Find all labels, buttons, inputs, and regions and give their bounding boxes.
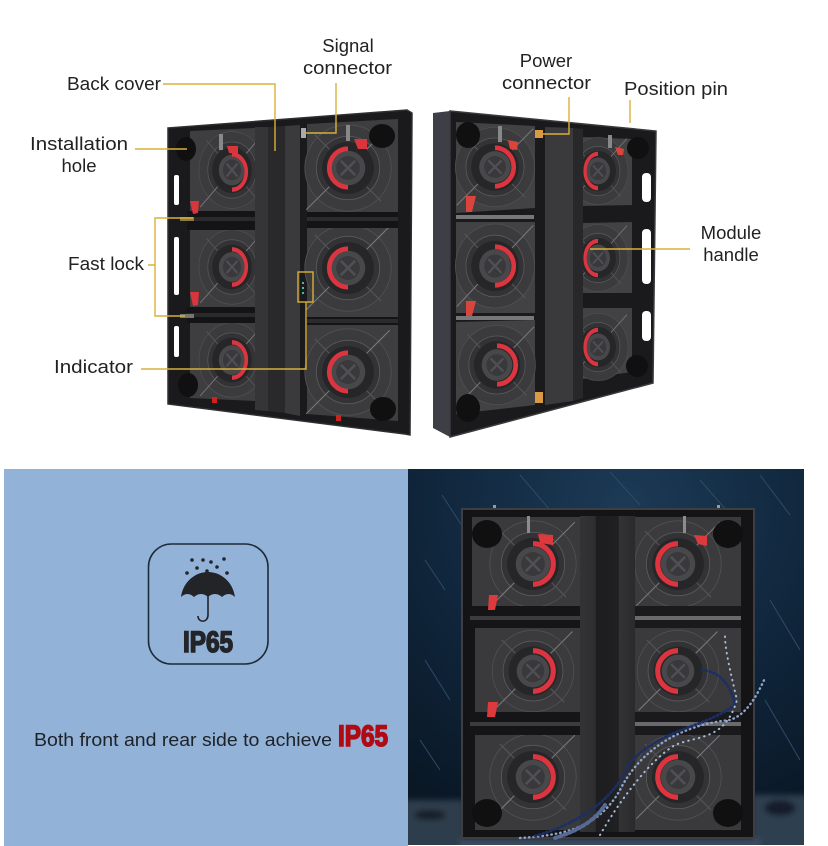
- module hubs: [490, 521, 721, 820]
- callout: signal connector: [303, 35, 392, 133]
- callout: indicator: Indicator: [54, 356, 133, 377]
- wet ground: [400, 795, 812, 846]
- module backplates: [190, 119, 398, 421]
- panel: IP65 description: [4, 469, 408, 846]
- right cabinet: rear view: [433, 111, 656, 437]
- callout: power connector: connector: [502, 72, 591, 93]
- cabinet frame: [168, 110, 412, 435]
- position pins: [493, 505, 720, 508]
- corner holes: [472, 520, 743, 827]
- corner installation holes: [176, 124, 396, 421]
- module backplates: [472, 517, 741, 830]
- centre column: [580, 516, 635, 832]
- power connectors: [535, 130, 543, 403]
- callout: signal connector: Signal: [322, 35, 374, 56]
- statement text: Both front and rear side to achieve: [34, 729, 332, 750]
- side edge: [433, 111, 450, 437]
- module handles: [533, 544, 678, 797]
- icon label: IP65: [183, 626, 233, 659]
- module hubs: [455, 127, 628, 405]
- panel: cabinet in the rain: [400, 469, 812, 846]
- module hubs: [199, 125, 391, 415]
- callout: power connector: Power: [520, 50, 572, 71]
- callout: back cover: [67, 73, 275, 151]
- cabinet frame: [462, 509, 754, 838]
- callout: position pin: Position pin: [624, 78, 728, 99]
- rain streaks: [420, 472, 800, 770]
- red IP65 emphasis: IP65: [338, 720, 388, 753]
- callout: installation hole: Installation: [30, 133, 128, 154]
- rods and latches: [469, 516, 741, 735]
- callout: installation hole: [30, 133, 187, 176]
- callout: module handle: Module: [701, 222, 761, 243]
- module handles: [495, 148, 598, 384]
- centre column: [545, 127, 583, 405]
- signal connector: [301, 128, 306, 138]
- left cabinet: rear view: [168, 110, 412, 435]
- callout: module handle: [590, 222, 761, 265]
- icon: umbrella with rain in rounded box: [148, 544, 268, 664]
- blue background: [4, 469, 408, 846]
- water splash: [520, 635, 765, 838]
- callout: fast lock: [68, 218, 193, 316]
- callout: power connector: [502, 50, 591, 134]
- callout: installation hole: hole: [62, 155, 96, 176]
- cabinet frame: [450, 111, 656, 437]
- callout: back cover: Back cover: [67, 73, 161, 94]
- callout: module handle: handle: [703, 244, 759, 265]
- corner holes: [456, 122, 649, 422]
- module handles: [232, 149, 348, 391]
- callout: signal connector: connector: [303, 57, 392, 78]
- fast lock latches and rods: [180, 125, 398, 421]
- handle windows: [642, 173, 651, 341]
- callout: fast lock: Fast lock: [68, 253, 145, 274]
- module backplates: [456, 122, 632, 414]
- callout: indicator: [54, 272, 313, 377]
- indicator LEDs: [302, 282, 304, 294]
- handle windows: [174, 175, 179, 357]
- night background: [408, 469, 804, 845]
- fast lock rods and latches: [456, 126, 624, 320]
- callout: position pin: [624, 78, 728, 123]
- centre column: [255, 125, 300, 416]
